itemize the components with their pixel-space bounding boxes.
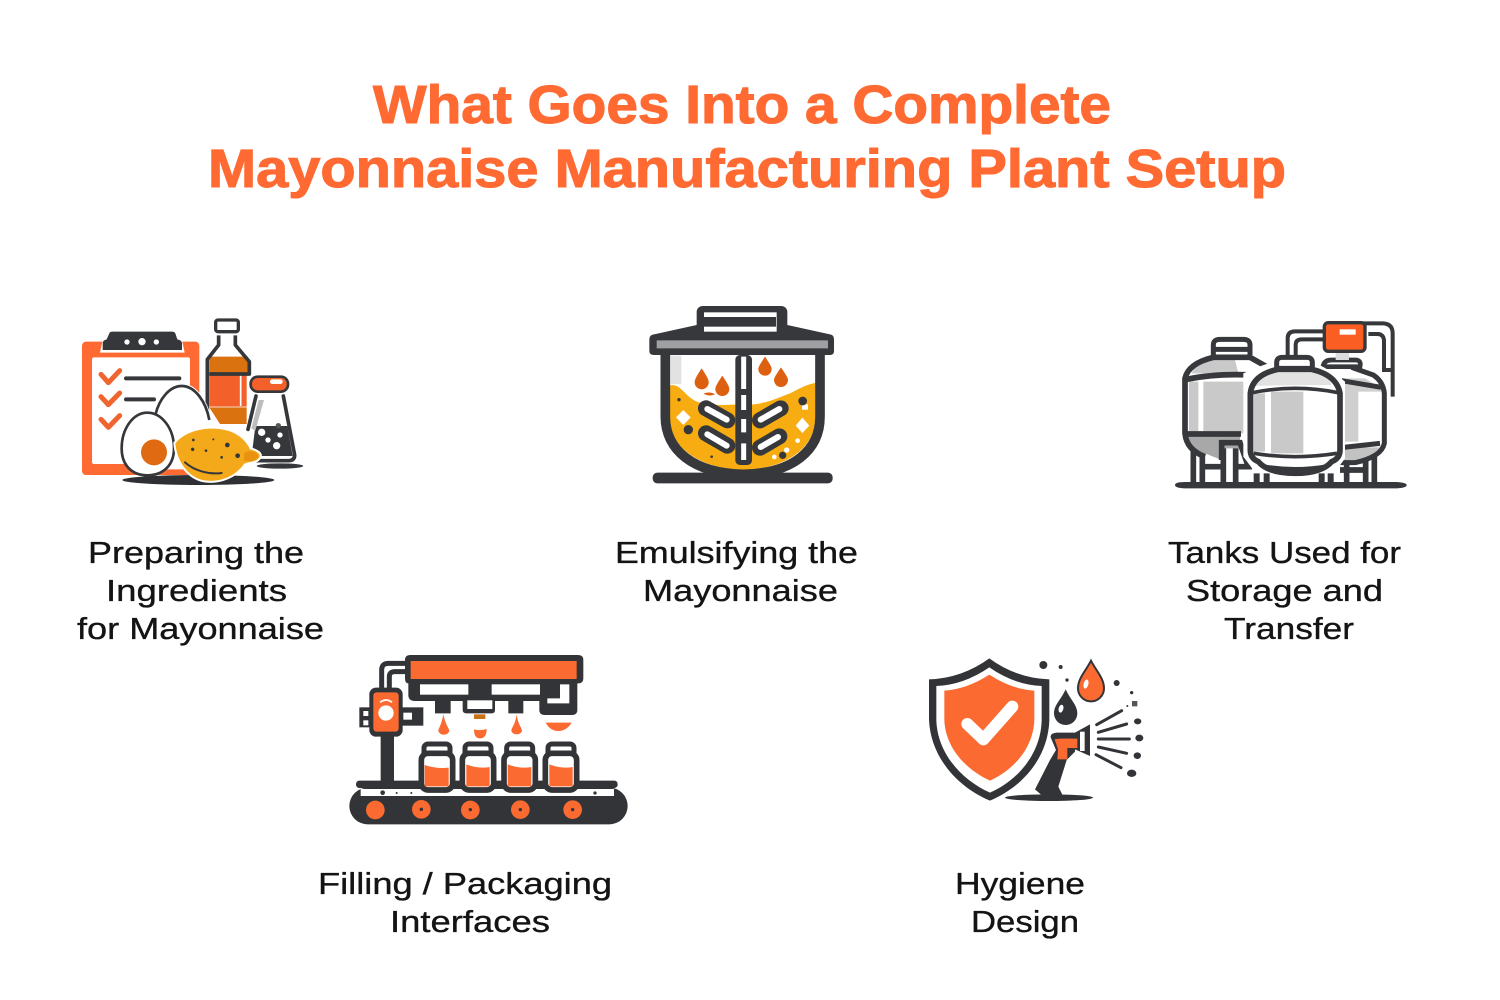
dark droplet — [1054, 689, 1077, 725]
label: tanks — [1168, 535, 1401, 646]
label: tanks: Storage and — [1186, 573, 1383, 608]
back egg — [157, 386, 209, 467]
icon: storage tanks — [1175, 323, 1407, 488]
hood — [649, 306, 834, 355]
label: emulsifying: Emulsifying the — [615, 535, 858, 570]
label: hygiene — [955, 866, 1085, 939]
shaft — [735, 355, 752, 465]
label: filling — [318, 866, 612, 939]
title: What Goes Into a Complete — [373, 75, 1111, 135]
right tank — [1323, 351, 1384, 482]
label: filling: Filling / Packaging — [318, 866, 612, 901]
label: tanks: Transfer — [1224, 611, 1354, 646]
base bar — [653, 473, 833, 483]
filling head — [405, 655, 583, 715]
lemon — [175, 429, 260, 481]
shield — [929, 658, 1049, 801]
salt shaker — [248, 377, 303, 469]
shadow — [122, 475, 274, 485]
bowl wall — [665, 353, 820, 474]
jars — [421, 744, 577, 790]
paddles — [706, 408, 781, 448]
conveyor belt — [349, 781, 628, 824]
bottle — [197, 320, 257, 433]
pipes — [1288, 323, 1393, 397]
label: tanks: Tanks Used for — [1168, 535, 1401, 570]
front egg — [122, 413, 174, 475]
label: emulsifying: Mayonnaise — [643, 573, 838, 608]
label: emulsifying — [615, 535, 858, 608]
label: preparing the ingredients: Ingredients — [106, 573, 287, 608]
icon: ingredients — [82, 320, 303, 485]
bowl contents — [669, 355, 815, 470]
label: preparing the ingredients: for Mayonnaise — [77, 611, 324, 646]
icon: hygiene shield — [929, 658, 1143, 801]
spray lines and dots — [1039, 661, 1143, 777]
ground line — [1175, 482, 1407, 488]
pump box — [1324, 323, 1365, 351]
label: filling: Interfaces — [390, 904, 550, 939]
spray gun — [1005, 724, 1093, 801]
title: Mayonnaise Manufacturing Plant Setup — [208, 139, 1286, 199]
drops — [438, 714, 572, 738]
clipboard — [82, 331, 199, 475]
label: preparing the ingredients — [77, 535, 324, 646]
bubbles — [676, 397, 809, 459]
mayonnaise fill — [669, 383, 815, 470]
label: hygiene: Hygiene — [955, 866, 1085, 901]
icon: filling line — [349, 655, 628, 824]
title — [208, 75, 1286, 199]
back egg outline — [155, 386, 209, 420]
middle tank — [1243, 357, 1345, 482]
droplets — [695, 357, 788, 396]
icon: emulsifying kettle — [649, 306, 834, 483]
pump column — [359, 663, 423, 782]
left tank — [1185, 339, 1267, 482]
orange droplet — [1078, 661, 1104, 701]
label: preparing the ingredients: Preparing the — [88, 535, 304, 570]
label: hygiene: Design — [971, 904, 1079, 939]
